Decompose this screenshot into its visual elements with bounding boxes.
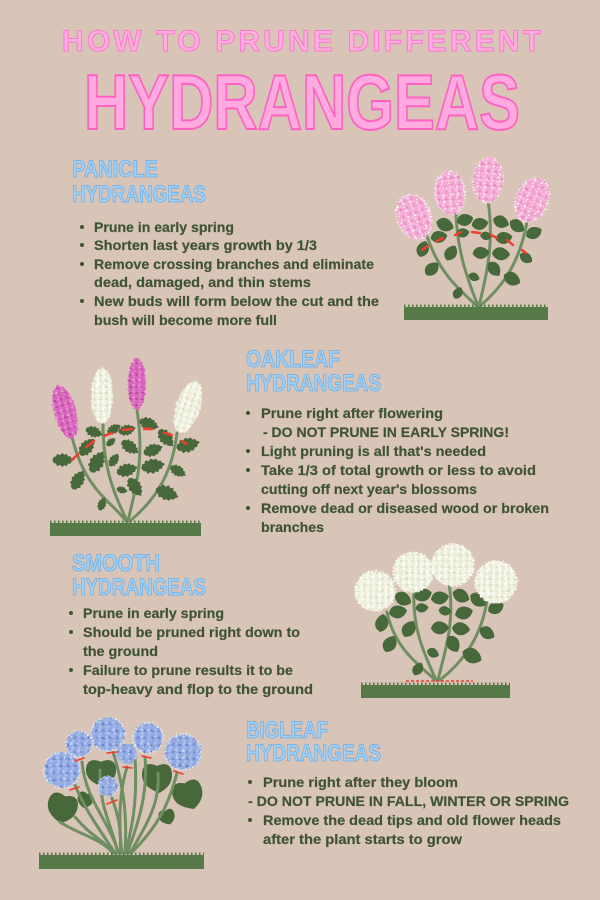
text block: oakleaf instructions: - DO NOT PRUNE IN EARLY SPRING! xyxy=(263,424,509,440)
text block: smooth instructions: Should be pruned right down to xyxy=(83,624,300,640)
heading: panicle: HYDRANGEAS xyxy=(72,181,206,208)
text block: bigleaf instructions: after the plant starts to grow xyxy=(263,831,462,847)
text block: smooth instructions: Prune in early spring xyxy=(83,605,224,621)
text block: smooth instructions xyxy=(69,605,313,697)
text block: smooth instructions: Failure to prune results it to be xyxy=(83,662,293,678)
text block: oakleaf instructions: Remove dead or diseased wood or broken xyxy=(261,500,549,516)
text block: oakleaf instructions: Take 1/3 of total growth or less to avoid xyxy=(261,462,536,478)
panel: oakleaf hydrangeas xyxy=(47,346,549,536)
text block: oakleaf instructions: cutting off next year's blossoms xyxy=(261,481,477,497)
heading: smooth: HYDRANGEAS xyxy=(72,574,206,601)
text block: smooth instructions: top-heavy and flop to the ground xyxy=(83,681,313,697)
heading: bigleaf: BIGLEAF xyxy=(246,717,328,744)
heading: panicle: PANICLE xyxy=(72,156,158,183)
panel: bigleaf hydrangeas xyxy=(39,717,569,869)
heading: panicle xyxy=(72,156,206,208)
title: how to prune different: HOW TO PRUNE DIFFERENT xyxy=(62,25,541,58)
heading: bigleaf xyxy=(246,717,381,767)
text block: oakleaf instructions: Prune right after flowering xyxy=(261,405,443,421)
illustration: panicle hydrangea plant xyxy=(390,156,555,320)
text block: oakleaf instructions: Light pruning is all that's needed xyxy=(261,443,486,459)
heading: smooth: SMOOTH xyxy=(72,550,160,577)
text block: bigleaf instructions: - DO NOT PRUNE IN FALL, WINTER OR SPRING xyxy=(248,793,569,809)
heading: bigleaf: HYDRANGEAS xyxy=(246,740,381,767)
illustration: smooth hydrangea plant xyxy=(355,544,517,698)
text block: oakleaf instructions: branches xyxy=(261,519,324,535)
text block: bigleaf instructions: Prune right after they bloom xyxy=(263,774,458,790)
text block: panicle instructions: dead, damaged, and thin stems xyxy=(94,274,311,290)
text block: oakleaf instructions xyxy=(246,405,549,535)
text block: panicle instructions: Prune in early spring xyxy=(94,219,234,235)
text block: panicle instructions: Shorten last years growth by 1/3 xyxy=(94,237,317,253)
heading: oakleaf: OAKLEAF xyxy=(246,346,340,373)
text block: panicle instructions xyxy=(80,219,379,328)
text block: panicle instructions: Remove crossing branches and eliminate xyxy=(94,256,374,272)
heading: smooth xyxy=(72,550,206,601)
text block: bigleaf instructions xyxy=(248,774,569,847)
panel: panicle hydrangeas xyxy=(72,156,555,328)
heading: oakleaf xyxy=(246,346,381,397)
text block: panicle instructions: New buds will form below the cut and the xyxy=(94,293,379,309)
heading: oakleaf: HYDRANGEAS xyxy=(246,370,381,397)
text block: bigleaf instructions: Remove the dead tips and old flower heads xyxy=(263,812,561,828)
illustration: oakleaf hydrangea plant xyxy=(47,358,208,536)
panel: smooth hydrangeas xyxy=(69,544,517,698)
text block: smooth instructions: the ground xyxy=(83,643,158,659)
text block: panicle instructions: bush will become more full xyxy=(94,312,277,328)
illustration: bigleaf hydrangea plant xyxy=(39,717,206,869)
